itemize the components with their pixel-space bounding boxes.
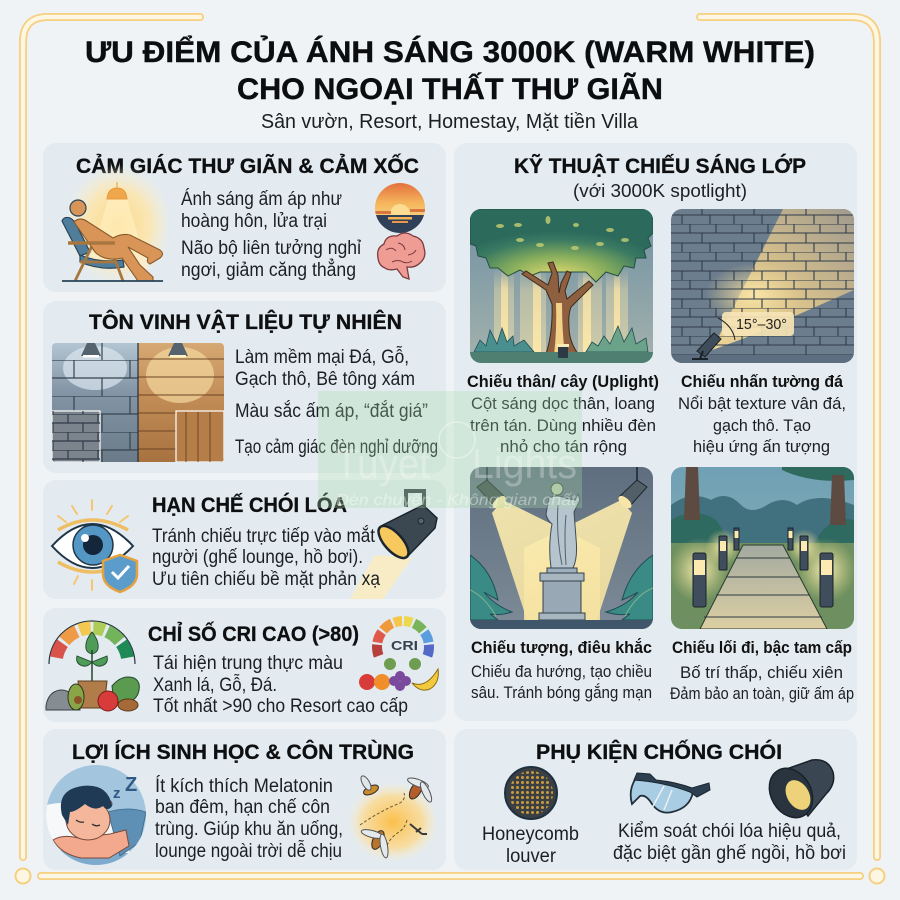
text: brain association: ngơi, giảm căng thẳng [181, 259, 356, 281]
panel: CRI index [43, 608, 446, 722]
title: CHO NGOẠI THẤT THƯ GIÃN [237, 72, 663, 106]
title [85, 35, 815, 106]
subtitle: Sân vườn, Resort, Homestay, Mặt tiền Villa [261, 111, 639, 133]
subheading: (với 3000K spotlight) [573, 181, 747, 201]
caption: statue lighting: Chiếu đa hướng, tạo chiều [471, 662, 652, 681]
angle label [718, 312, 794, 340]
panel: biological and insect benefits [43, 729, 446, 870]
caption: tree uplight: Chiếu thân/ cây (Uplight) [467, 372, 659, 391]
icon: CRI colour ring and fruit: CRI [391, 638, 418, 653]
text: glare guidance: người (ghế lounge, hồ bơi). [152, 547, 363, 568]
icon: sleeping person: Z [125, 774, 137, 796]
caption: statue lighting: sâu. Tránh bóng gắng mạn [471, 683, 652, 702]
label: honeycomb louver [482, 824, 579, 867]
text: melatonin: ban đêm, hạn chế côn [155, 797, 330, 818]
frame bottom rail and corner knobs [16, 868, 884, 884]
text: glare guidance [152, 525, 380, 590]
caption: tree uplight: trên tán. Dùng nhiều đèn [470, 416, 656, 435]
text: warm light like sunset [181, 189, 342, 232]
watermark: Đèn chuyên - Không gian chất [336, 492, 577, 509]
text: materials benefits: Tạo cảm giác đèn nghỉ dưỡng [235, 437, 438, 458]
text: CRI explanation [153, 653, 408, 717]
icon: sunset [375, 183, 425, 233]
image: stone and wood comparison [52, 343, 224, 462]
text: CRI explanation: Tái hiện trung thực màu [153, 653, 343, 674]
caption: path lighting [670, 638, 854, 703]
icon: eye with shield [52, 500, 137, 592]
caption: tree uplight [467, 372, 659, 456]
caption: path lighting: Chiếu lối đi, bậc tam cấp [672, 638, 852, 657]
label: honeycomb louver: louver [506, 846, 557, 867]
label: honeycomb louver: Honeycomb [482, 824, 579, 845]
text: CRI explanation: Tốt nhất >90 cho Resort cao cấp [153, 696, 408, 717]
text: materials benefits: Màu sắc ấm áp, “đắt giá” [235, 400, 428, 422]
heading: layered lighting: KỸ THUẬT CHIẾU SÁNG LỚP [514, 154, 806, 178]
icon: CRI colour ring and fruit [359, 621, 438, 691]
text: glare guidance: Ưu tiên chiếu bề mặt phản xạ [152, 569, 380, 590]
text: accessories benefit: đặc biệt gần ghế ngồi, hồ bơi [613, 843, 846, 864]
text: melatonin: trùng. Giúp khu ăn uống, [155, 819, 343, 840]
icon: visor shield [631, 773, 710, 813]
text: materials benefits [235, 346, 438, 458]
light beam from spotlight [350, 555, 412, 599]
heading: natural materials: TÔN VINH VẬT LIỆU TỰ NHIÊN [89, 310, 402, 334]
panel: glare reduction [43, 480, 446, 599]
icon: sleeping person [46, 765, 146, 868]
text: warm light like sunset: hoàng hôn, lửa trại [181, 211, 327, 232]
caption: wall grazing: hiệu ứng ấn tượng [693, 437, 830, 456]
heading: CRI: CHỈ SỐ CRI CAO (>80) [148, 622, 359, 646]
image: stone wall grazing [671, 209, 854, 363]
caption: statue lighting: Chiếu tượng, điêu khắc [471, 638, 652, 657]
icon: gauge with plant and produce [46, 621, 139, 711]
caption: wall grazing: Nổi bật texture vân đá, [678, 394, 846, 413]
caption: path lighting: Bố trí thấp, chiếu xiên [680, 663, 843, 682]
text: CRI explanation: Xanh lá, Gỗ, Đá. [153, 674, 277, 696]
text: materials benefits: Gạch thô, Bê tông xám [235, 369, 415, 390]
watermark: Lights [472, 440, 577, 487]
panel: natural materials [43, 301, 446, 473]
caption: tree uplight: nhỏ cho tán rộng [500, 437, 627, 456]
caption: path lighting: Đảm bảo an toàn, giữ ấm áp [670, 684, 854, 703]
heading: accessories: PHỤ KIỆN CHỐNG CHÓI [536, 740, 782, 764]
caption: wall grazing [678, 372, 846, 456]
text: materials benefits: Làm mềm mại Đá, Gỗ, [235, 346, 409, 368]
text: melatonin [155, 776, 343, 862]
panel: anti-glare accessories [454, 729, 857, 870]
image: path lighting [669, 467, 856, 629]
heading: glare: HẠN CHẾ CHÓI LÓA [152, 493, 347, 517]
watermark: Tuyet [335, 440, 430, 487]
caption: wall grazing: gạch thô. Tạo [713, 416, 811, 435]
icon: sleeping person: z [113, 785, 120, 802]
icon: insects around warm light [347, 774, 439, 862]
heading: biological: LỢI ÍCH SINH HỌC & CÔN TRÙNG [72, 740, 414, 764]
icon: lens hood [761, 760, 834, 826]
text: accessories benefit: Kiểm soát chói lóa hiệu quả, [618, 821, 841, 842]
text: brain association [181, 238, 362, 281]
text: warm light like sunset: Ánh sáng ấm áp như [181, 189, 342, 210]
title: ƯU ĐIỂM CỦA ÁNH SÁNG 3000K (WARM WHITE) [85, 35, 815, 69]
caption: tree uplight: Cột sáng dọc thân, loang [471, 394, 655, 413]
caption: wall grazing: Chiếu nhấn tường đá [681, 372, 844, 391]
text: melatonin: lounge ngoài trời dễ chịu [155, 840, 342, 862]
icon: spotlight [373, 491, 437, 563]
caption: statue lighting [471, 638, 652, 702]
panel: layered lighting technique [454, 143, 857, 721]
icon: honeycomb louver [505, 767, 557, 819]
image: statue lighting [470, 467, 653, 629]
heading: relaxation: CẢM GIÁC THƯ GIÃN & CẢM XỐC [76, 154, 419, 178]
icon: relaxing person under lamp [62, 165, 172, 285]
image: tree uplight [470, 209, 653, 363]
text: brain association: Não bộ liên tưởng nghỉ [181, 238, 362, 259]
panel: relaxation and emotion [43, 143, 446, 292]
angle label: 15°–30° [736, 316, 787, 333]
icon: brain [378, 233, 425, 279]
watermark [318, 391, 582, 509]
text: glare guidance: Tránh chiếu trực tiếp vào mắt [152, 525, 376, 547]
text: accessories benefit [613, 821, 846, 864]
text: melatonin: Ít kích thích Melatonin [155, 776, 333, 797]
